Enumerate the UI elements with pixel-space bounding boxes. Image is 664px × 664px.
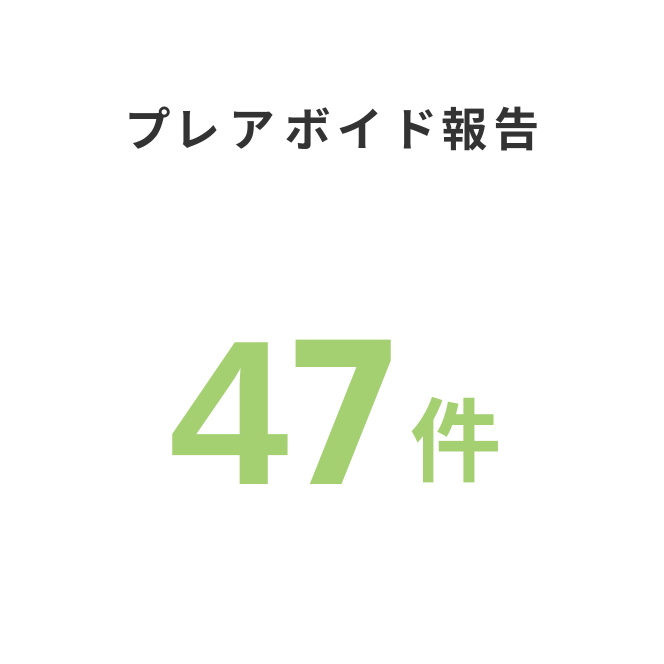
unit: 件	[410, 369, 501, 501]
big number with unit	[169, 298, 501, 531]
digit 4: 4	[169, 298, 289, 528]
title: プレアボイド報告	[126, 94, 548, 160]
digit 7: 7	[284, 300, 405, 531]
